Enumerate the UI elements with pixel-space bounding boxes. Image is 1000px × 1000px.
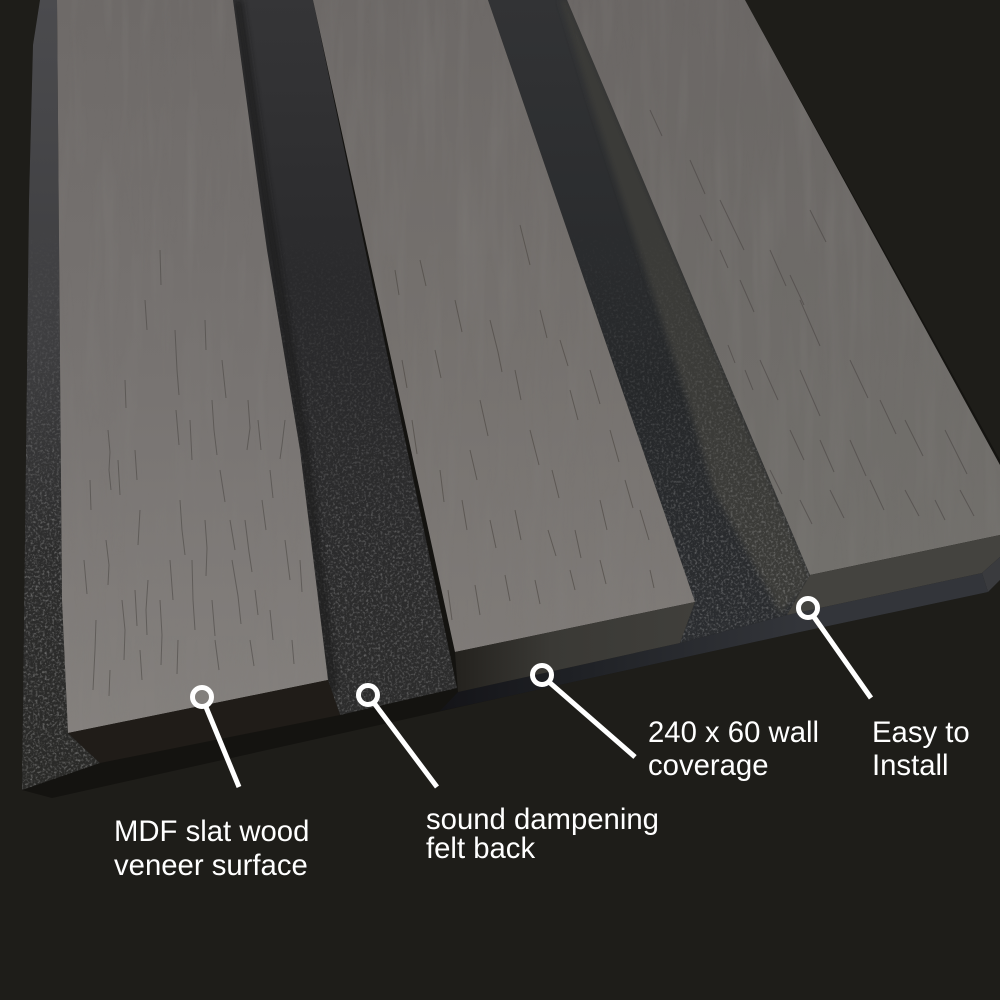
- marker ring: [798, 598, 818, 618]
- pointer line: [374, 703, 437, 787]
- panel base edge: [22, 0, 1000, 798]
- slat 3: [560, 0, 1000, 580]
- marker ring: [192, 688, 212, 706]
- label: MDF slat wood: [114, 815, 309, 848]
- pointer line: [549, 682, 635, 757]
- right corner chamfer: [982, 557, 1000, 592]
- marker ring: [358, 686, 378, 704]
- felt channel shadow: [238, 0, 333, 690]
- label: veneer surface: [114, 849, 308, 882]
- slat 2 front face: [455, 602, 695, 692]
- label: Easy to: [872, 716, 970, 749]
- label: Install: [872, 749, 949, 782]
- felt texture: [281, 272, 809, 714]
- pointer line: [814, 617, 871, 698]
- label: felt back: [426, 832, 535, 865]
- slat 1: [50, 0, 340, 740]
- marker ring: [532, 666, 552, 684]
- felt channel right: [488, 0, 810, 643]
- slat 2: [310, 0, 700, 660]
- pointer line: [206, 707, 239, 787]
- wood grain: [84, 250, 302, 696]
- wood grain: [650, 110, 974, 524]
- felt channel left: [233, 0, 457, 715]
- product photo: acoustic slat panel: [20, 0, 1000, 800]
- groove shading: [560, 0, 810, 613]
- label: sound dampening: [426, 803, 659, 836]
- slat 3 front face: [787, 535, 1000, 615]
- label: coverage: [648, 749, 769, 782]
- slat 1 front face: [68, 680, 340, 763]
- lower strips: [440, 573, 988, 711]
- callout: Easy to Install: [798, 598, 970, 782]
- callout: sound dampening felt back: [358, 686, 659, 865]
- label: 240 x 60 wall: [648, 716, 819, 749]
- callout: 240 x 60 wall coverage: [532, 666, 819, 782]
- left felt edge: [20, 0, 100, 800]
- wood grain: [395, 225, 654, 620]
- callout: MDF slat wood veneer surface: [114, 688, 309, 882]
